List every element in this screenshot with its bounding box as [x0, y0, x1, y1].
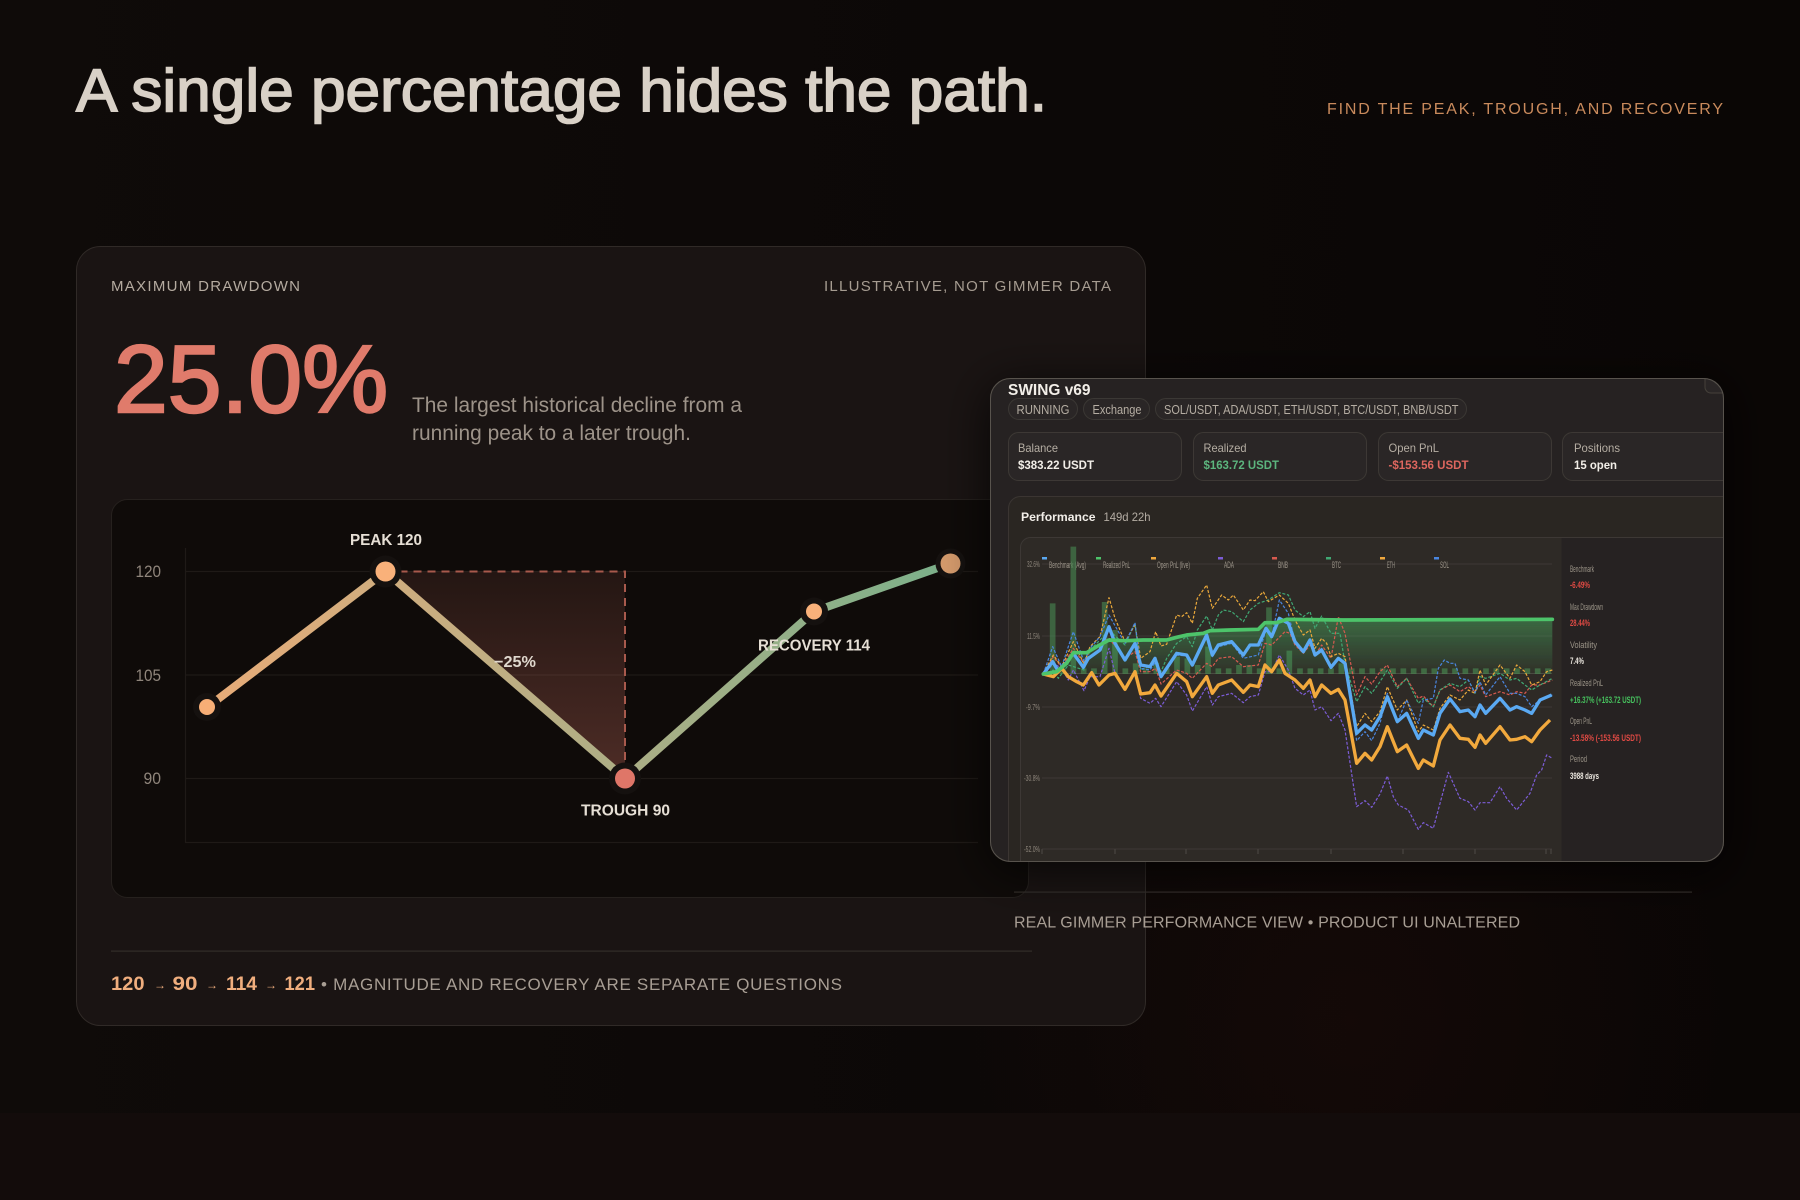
- legend: BTC: [1332, 560, 1341, 571]
- sidebar metrics: Max Drawdown: [1570, 602, 1603, 613]
- footer note: 90: [172, 974, 198, 995]
- legend: Realized PnL: [1103, 560, 1130, 571]
- label: peak: PEAK 120: [350, 532, 422, 549]
- description: [412, 394, 742, 445]
- performance period: 149d 22h: [1104, 510, 1150, 524]
- legend: Open PnL (live): [1157, 560, 1190, 571]
- caption divider: [1014, 892, 1692, 893]
- status pills: Exchange: [1092, 403, 1142, 417]
- sidebar metrics: -13.58% (-153.56 USDT): [1570, 733, 1641, 744]
- stat: balance: $383.22 USDT: [1018, 458, 1095, 472]
- legend: BNB: [1278, 560, 1288, 571]
- point: recovery: [800, 598, 828, 626]
- legend: Benchmark (Avg): [1049, 560, 1086, 571]
- screenshot caption: REAL GIMMER PERFORMANCE VIEW • PRODUCT UI UNALTERED: [1014, 914, 1520, 932]
- stat: positions: 15 open: [1574, 458, 1617, 472]
- axis values: 11.5%: [1027, 631, 1040, 641]
- chart: illustrative drawdown line: [112, 500, 1028, 898]
- stat: realized: [1194, 432, 1366, 480]
- sidebar metrics: +16.37% (+163.72 USDT): [1570, 695, 1641, 706]
- sidebar metrics: 3988 days: [1570, 771, 1599, 782]
- stat: positions: [1562, 432, 1736, 480]
- stat: open pnl: Open PnL: [1388, 441, 1439, 455]
- corner tab: [1704, 378, 1724, 394]
- sidebar metrics: -6.49%: [1570, 580, 1590, 591]
- drawdown shaded area: [386, 572, 625, 778]
- performance panel: [1008, 496, 1740, 878]
- point: start: [193, 693, 221, 721]
- footer note: 121: [284, 974, 315, 995]
- stat: positions: Positions: [1574, 441, 1620, 455]
- footer note: →: [154, 978, 166, 992]
- legend: [1042, 557, 1449, 571]
- stat: balance: [1008, 432, 1182, 480]
- panel: maximum drawdown card: [76, 246, 1146, 1026]
- point: peak: [370, 556, 402, 588]
- sidebar metrics: Period: [1570, 754, 1587, 765]
- footer note: 120: [111, 974, 144, 995]
- stat: open pnl: [1378, 432, 1552, 480]
- axis values: -30.8%: [1024, 773, 1040, 783]
- axis values: 32.6%: [1027, 559, 1040, 569]
- footer note: 114: [226, 974, 257, 995]
- performance chart: SOL: [1440, 560, 1449, 571]
- sidebar metrics: Realized PnL: [1570, 678, 1603, 689]
- series lines: [1043, 547, 1552, 829]
- subtitle: FIND THE PEAK, TROUGH, AND RECOVERY: [1327, 101, 1723, 118]
- sidebar metrics: [1570, 564, 1641, 782]
- stat: open pnl: -$153.56 USDT: [1388, 458, 1469, 472]
- sidebar metrics: Open PnL: [1570, 716, 1592, 727]
- sidebar metrics: Volatility: [1570, 640, 1597, 651]
- title: A single percentage hides the path.: [76, 57, 1047, 124]
- price line: [207, 564, 950, 778]
- performance chart: [1024, 547, 1552, 854]
- y axis labels: 90: [144, 770, 161, 788]
- sidebar metrics: Benchmark: [1570, 564, 1594, 575]
- card heading: MAXIMUM DRAWDOWN: [111, 278, 300, 295]
- plot background: [1020, 538, 1740, 878]
- label: trough: TROUGH 90: [581, 802, 670, 820]
- footer note: →: [206, 978, 218, 992]
- strategy name: SWING v69: [1008, 382, 1091, 399]
- sidebar metrics: 7.4%: [1570, 656, 1584, 667]
- axis values: [1024, 559, 1040, 854]
- performance heading: Performance: [1021, 510, 1096, 524]
- panel: product screenshot: [990, 370, 1740, 878]
- status pills: [1008, 398, 1466, 420]
- label: recovery: RECOVERY 114: [758, 638, 870, 654]
- stat: realized: $163.72 USDT: [1204, 458, 1280, 472]
- footer note: [111, 974, 842, 995]
- stat: realized: Realized: [1204, 441, 1246, 455]
- label: drawdown percent: −25%: [494, 654, 536, 671]
- footer note: →: [265, 978, 277, 992]
- sidebar metrics: 28.44%: [1570, 618, 1590, 629]
- point: end: [936, 548, 966, 578]
- card disclaimer: ILLUSTRATIVE, NOT GIMMER DATA: [824, 278, 1111, 295]
- y axis labels: [136, 563, 161, 788]
- description: The largest historical decline from a: [412, 394, 742, 417]
- legend: ETH: [1387, 560, 1395, 571]
- stat: balance: Balance: [1018, 441, 1058, 455]
- axis values: -52.0%: [1024, 844, 1040, 854]
- y axis labels: 105: [136, 667, 161, 685]
- footer note: • MAGNITUDE AND RECOVERY ARE SEPARATE QUESTIONS: [321, 975, 842, 994]
- axis values: -9.7%: [1026, 702, 1040, 712]
- status pills: SOL/USDT, ADA/USDT, ETH/USDT, BTC/USDT, BNB/USDT: [1164, 403, 1459, 417]
- point: trough: [609, 762, 641, 794]
- divider: [111, 950, 1032, 952]
- description: running peak to a later trough.: [412, 422, 691, 445]
- status pills: RUNNING: [1016, 403, 1070, 417]
- y axis labels: 120: [136, 563, 161, 581]
- drawdown dashed guides: [386, 572, 625, 778]
- legend: ADA: [1224, 560, 1234, 571]
- big number: 25.0%: [114, 326, 388, 433]
